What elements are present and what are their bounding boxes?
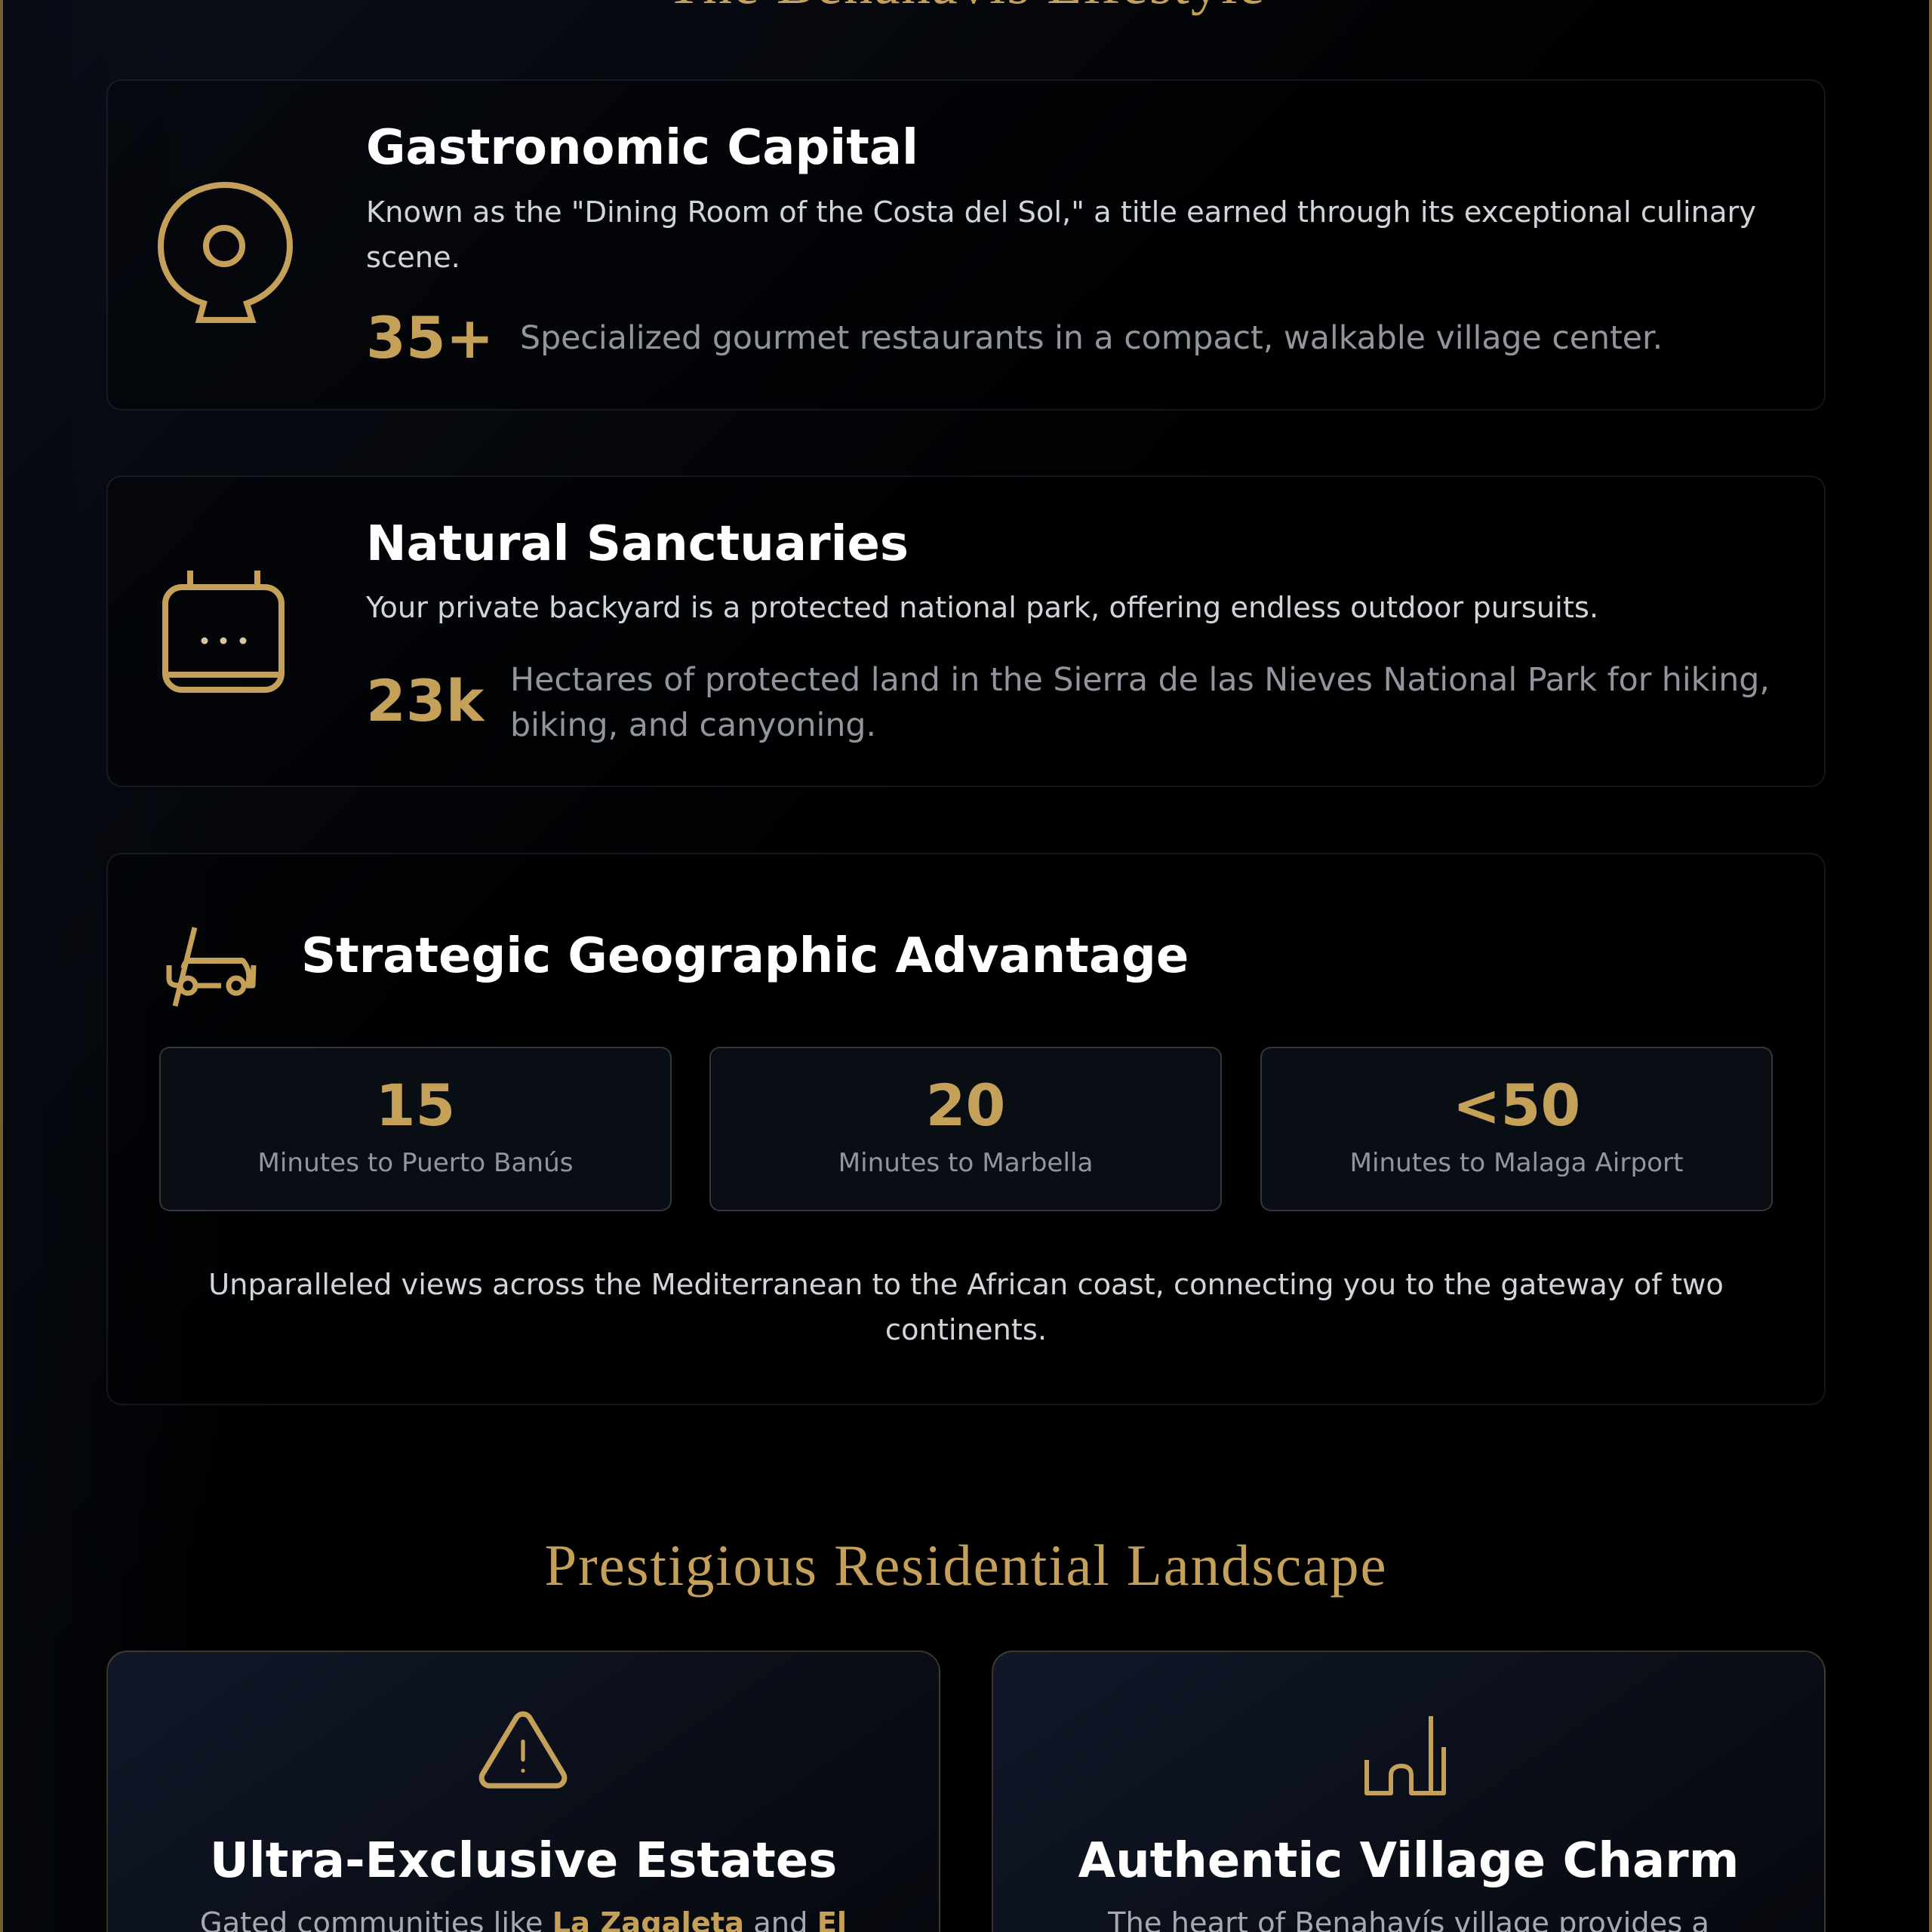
text: 23k description: biking, and canyoning.: [510, 706, 876, 744]
stat box: 15 minutes: [159, 1047, 672, 1211]
icon: dining cloche: [158, 182, 293, 323]
heading: Gastronomic Capital: Gastronomic Capital: [366, 120, 918, 176]
panel: Authentic Village Charm: [992, 1651, 1826, 1932]
stat: 23k: 23k: [366, 667, 484, 734]
icon: car: [166, 927, 257, 1007]
panel: Gastronomic Capital: [106, 79, 1826, 411]
text: views description: Unparalleled views across the Mediterranean to the African coast, connecting you to the gateway of two: [208, 1268, 1724, 1302]
heading: Authentic Village Charm: Authentic Village Charm: [1078, 1833, 1739, 1889]
icon: calendar: [162, 571, 285, 693]
text: Gastronomic description: Known as the "Dining Room of the Costa del Sol," a title earned through its exceptional culinary: [366, 195, 1756, 229]
stat: 35+: 35+: [366, 304, 494, 371]
number: 15: 15: [376, 1072, 455, 1139]
text: 35+ description: Specialized gourmet restaurants in a compact, walkable village center.: [520, 319, 1663, 357]
icon: village skyline: [1364, 1716, 1446, 1795]
number: 20: 20: [926, 1072, 1005, 1139]
heading: Natural Sanctuaries: Natural Sanctuaries: [366, 516, 909, 572]
text: Gastronomic description: [366, 195, 1756, 275]
label: Puerto Banús: Minutes to Puerto Banús: [257, 1148, 574, 1178]
panel: Ultra-Exclusive Estates: [106, 1651, 940, 1932]
text: 23k description: Hectares of protected land in the Sierra de las Nieves National Park for hiking,: [510, 661, 1770, 699]
text: Gastronomic description: scene.: [366, 241, 460, 275]
stat box: under 50 minutes: [1260, 1047, 1773, 1211]
heading: Strategic Geographic Advantage: Strategic Geographic Advantage: [301, 928, 1189, 984]
panel: Natural Sanctuaries: [106, 475, 1826, 787]
label: Malaga Airport: Minutes to Malaga Airport: [1349, 1148, 1684, 1178]
text: 23k description: [510, 661, 1770, 744]
text: views description: continents.: [885, 1313, 1047, 1347]
panel: Strategic Geographic Advantage: [106, 853, 1826, 1405]
heading: Ultra-Exclusive Estates: Ultra-Exclusive Estates: [210, 1833, 837, 1889]
text: views description: [208, 1268, 1724, 1347]
icon: warning triangle: [478, 1712, 568, 1789]
text: Natural Sanctuaries description: Your private backyard is a protected national park, offering endless outdoor pursuits.: [366, 591, 1598, 625]
number: <50: <50: [1453, 1072, 1580, 1139]
stat box: 20 minutes: [709, 1047, 1222, 1211]
label: Marbella: Minutes to Marbella: [838, 1148, 1093, 1178]
heading: Prestigious Residential Landscape: Prestigious Residential Landscape: [545, 1534, 1387, 1598]
